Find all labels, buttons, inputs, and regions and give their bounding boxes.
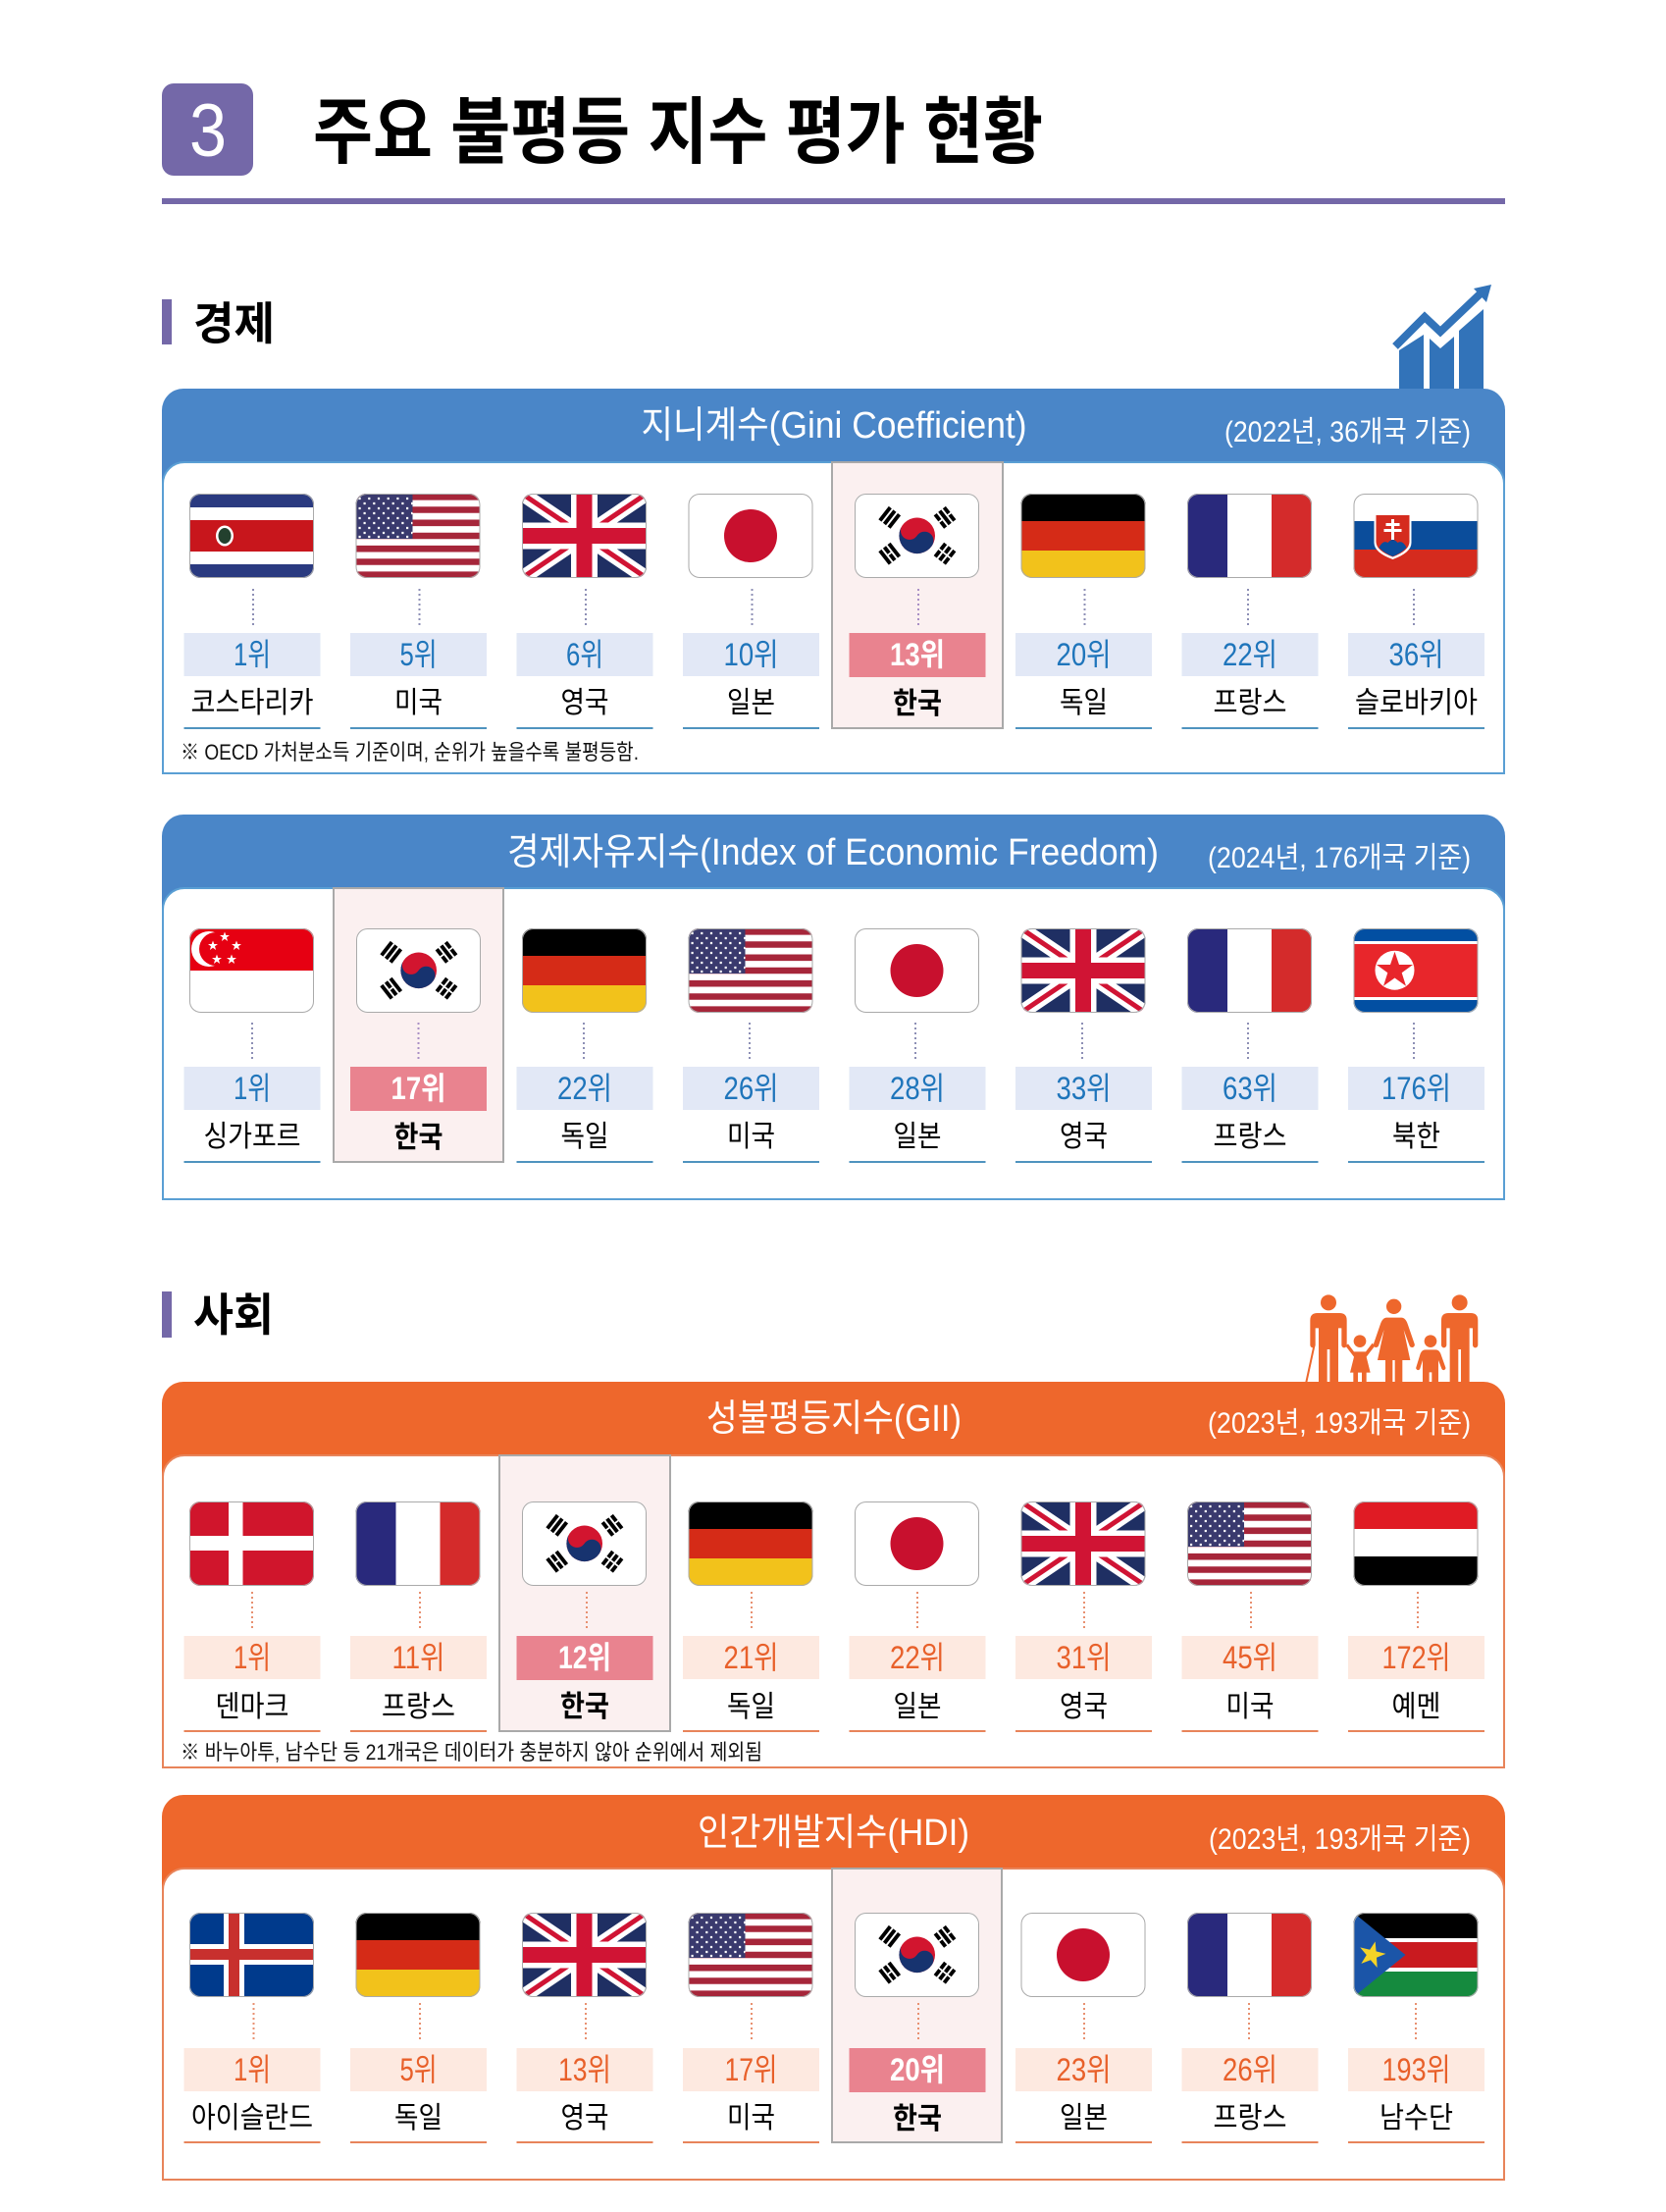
column: 독일: 독일 — [561, 1121, 608, 1153]
panel header: 인간개발지수 — [162, 1795, 1505, 1892]
panel body — [163, 1869, 1504, 2180]
column: 한국 (highlight): 한국 — [560, 1691, 609, 1723]
column: 코스타리카: 1위 — [234, 637, 271, 672]
header basis: (2022년, 36개국 기준) — [1224, 416, 1471, 448]
column: 일본 — [850, 928, 985, 1162]
column: 미국: 미국 — [1226, 1691, 1274, 1723]
column: 슬로바키아: 슬로바키아 — [1355, 687, 1478, 719]
header basis: (2023년, 193개국 기준) — [1208, 1407, 1471, 1440]
column: 일본 — [1015, 1913, 1152, 2142]
column: 영국 — [1015, 1501, 1152, 1731]
panel body — [163, 888, 1504, 1199]
column: 영국 — [1015, 928, 1152, 1162]
column: 미국 — [683, 1913, 819, 2142]
column: 일본: 일본 — [1060, 2102, 1108, 2134]
column: 독일: 독일 — [394, 2102, 443, 2134]
column: 일본: 10위 — [724, 637, 779, 672]
panel: 경제자유지수 — [162, 815, 1505, 1199]
column: 독일 — [516, 928, 653, 1162]
column: 아이슬란드 — [184, 1913, 320, 2142]
column: 일본: 28위 — [890, 1071, 945, 1106]
column: 슬로바키아: 36위 — [1389, 637, 1444, 672]
column: 독일: 21위 — [724, 1640, 779, 1675]
column: 한국 (highlight): 12위 — [558, 1640, 611, 1675]
column: 덴마크: 1위 — [234, 1640, 271, 1675]
column: 일본: 22위 — [890, 1640, 945, 1675]
column: 덴마크 — [184, 1501, 320, 1731]
column: 남수단: 남수단 — [1380, 2102, 1453, 2134]
panel: 성불평등지수 — [162, 1382, 1505, 1767]
column: 미국 — [683, 928, 819, 1162]
section heading: 경제: 경제 — [193, 298, 275, 349]
header title: 경제자유지수(Index of Economic Freedom) — [507, 832, 1159, 873]
column: 한국 (highlight): 한국 — [893, 2103, 942, 2135]
column: 한국 (highlight): 한국 — [893, 688, 942, 720]
column: 미국: 45위 — [1223, 1640, 1277, 1675]
column: 한국 (highlight) — [832, 1869, 1002, 2142]
column: 프랑스: 26위 — [1223, 2052, 1277, 2087]
column: 일본 — [683, 494, 819, 728]
column: 한국 (highlight) — [334, 888, 503, 1162]
column: 영국: 영국 — [561, 2102, 608, 2134]
header title: 성불평등지수(GII) — [706, 1398, 962, 1440]
panel body — [163, 1455, 1504, 1767]
column: 일본: 일본 — [893, 1691, 942, 1723]
column: 영국: 영국 — [1060, 1691, 1108, 1723]
column: 미국: 미국 — [727, 1121, 775, 1153]
column: 일본 — [850, 1501, 985, 1731]
column: 미국: 미국 — [727, 2102, 775, 2134]
column: 북한: 176위 — [1381, 1071, 1451, 1106]
column: 프랑스: 프랑스 — [382, 1691, 455, 1723]
column: 영국 — [516, 494, 653, 728]
column: 슬로바키아 — [1348, 494, 1484, 728]
column: 영국: 영국 — [561, 687, 608, 719]
column: 영국: 6위 — [566, 637, 603, 672]
column: 독일 — [1015, 494, 1152, 728]
column: 프랑스: 프랑스 — [1213, 687, 1287, 719]
column: 한국 (highlight) — [499, 1455, 670, 1731]
column: 독일 — [683, 1501, 819, 1731]
column: 싱가포르: 1위 — [234, 1071, 271, 1106]
column: 한국 (highlight) — [832, 462, 1003, 728]
section heading: 사회: 사회 — [193, 1290, 274, 1341]
panel header: 경제자유지수 — [162, 815, 1505, 913]
column: 독일: 독일 — [1060, 687, 1108, 719]
column: 프랑스 — [1181, 494, 1319, 728]
column: 독일 — [350, 1913, 487, 2142]
panel: 인간개발지수 — [162, 1795, 1505, 2180]
column: 한국 (highlight): 13위 — [890, 637, 945, 672]
column: 한국 (highlight): 한국 — [394, 1122, 443, 1154]
icon: rising chart — [1395, 285, 1491, 389]
column: 북한 — [1348, 928, 1484, 1162]
column: 독일: 5위 — [400, 2052, 438, 2087]
header title: 지니계수(Gini Coefficient) — [642, 405, 1026, 447]
column: 프랑스: 프랑스 — [1213, 1121, 1287, 1153]
column: 한국 (highlight): 17위 — [390, 1071, 445, 1106]
column: 남수단 — [1348, 1913, 1484, 2142]
column: 미국 — [1181, 1501, 1319, 1731]
panel: 지니계수 — [162, 389, 1505, 773]
column: 미국 — [350, 494, 487, 728]
column: 프랑스: 11위 — [392, 1640, 445, 1675]
title badge: 3: 3 — [189, 89, 227, 173]
column: 남수단: 193위 — [1381, 2052, 1450, 2087]
column: 프랑스 — [1181, 928, 1319, 1162]
column: 덴마크: 덴마크 — [216, 1691, 288, 1723]
column: 영국: 13위 — [558, 2052, 611, 2087]
column: 미국: 26위 — [724, 1071, 779, 1106]
column: 아이슬란드: 아이슬란드 — [191, 2102, 313, 2134]
panel header: 지니계수 — [162, 389, 1505, 486]
column: 일본: 일본 — [727, 687, 775, 719]
footnote: ※ OECD 가처분소득 기준이며, 순위가 높을수록 불평등함. — [181, 740, 639, 764]
title: 주요 불평등 지수 평가 현황 — [313, 91, 1043, 173]
title badge: 3 — [162, 83, 253, 176]
header basis: (2023년, 193개국 기준) — [1209, 1823, 1471, 1856]
column: 프랑스: 프랑스 — [1213, 2102, 1287, 2134]
column: 영국: 31위 — [1056, 1640, 1111, 1675]
column: 독일: 독일 — [727, 1691, 775, 1723]
column: 영국: 영국 — [1060, 1121, 1108, 1153]
column: 독일: 20위 — [1056, 637, 1111, 672]
column: 한국 (highlight): 20위 — [890, 2052, 945, 2087]
column: 일본: 일본 — [893, 1121, 942, 1153]
header basis: (2024년, 176개국 기준) — [1208, 842, 1471, 874]
column: 프랑스: 22위 — [1223, 637, 1277, 672]
column: 북한: 북한 — [1392, 1121, 1440, 1153]
column: 영국: 33위 — [1056, 1071, 1111, 1106]
column: 독일: 22위 — [557, 1071, 612, 1106]
column: 프랑스: 63위 — [1223, 1071, 1277, 1106]
panel header: 성불평등지수 — [162, 1382, 1505, 1477]
header title: 인간개발지수(HDI) — [698, 1813, 969, 1854]
column: 미국: 미국 — [394, 687, 443, 719]
column: 미국: 17위 — [724, 2052, 777, 2087]
footnote: ※ 바누아투, 남수단 등 21개국은 데이터가 충분하지 않아 순위에서 제외됨 — [181, 1740, 762, 1764]
column: 영국 — [516, 1913, 653, 2142]
column: 싱가포르: 싱가포르 — [204, 1121, 300, 1153]
column: 미국: 5위 — [400, 637, 438, 672]
column: 코스타리카: 코스타리카 — [190, 687, 314, 719]
panel body — [163, 462, 1504, 773]
column: 예멘 — [1348, 1501, 1484, 1731]
column: 예멘: 예멘 — [1391, 1691, 1440, 1723]
column: 프랑스 — [350, 1501, 487, 1731]
column: 코스타리카 — [184, 494, 320, 728]
icon: family — [1306, 1294, 1478, 1385]
column: 예멘: 172위 — [1381, 1640, 1450, 1675]
column: 싱가포르 — [184, 928, 320, 1162]
column: 일본: 23위 — [1056, 2052, 1111, 2087]
column: 아이슬란드: 1위 — [234, 2052, 271, 2087]
column: 프랑스 — [1181, 1913, 1319, 2142]
